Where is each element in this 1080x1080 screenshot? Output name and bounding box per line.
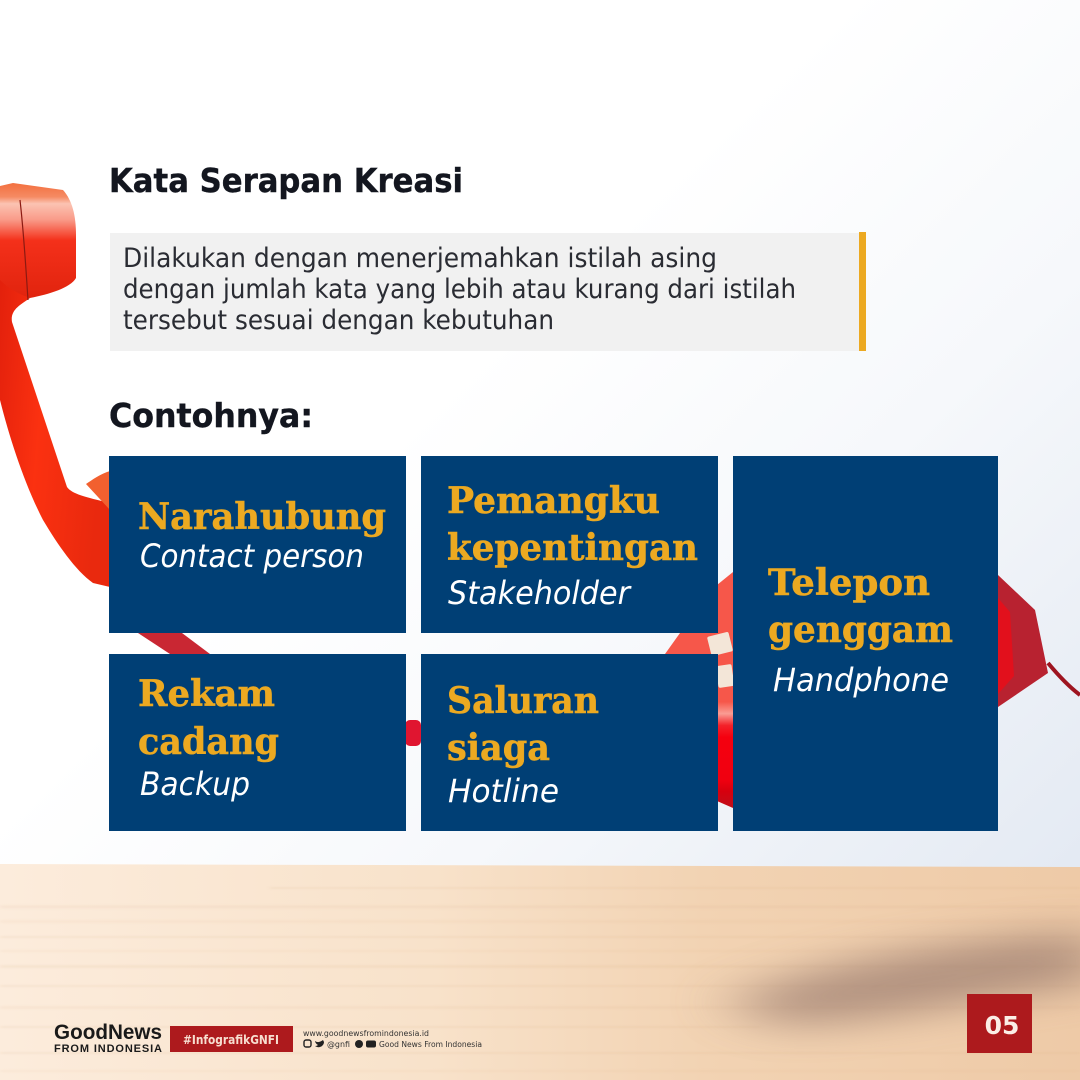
definition callout: Dilakukan dengan menerjemahkan istilah asing [123,243,717,274]
definition callout: dengan jumlah kata yang lebih atau kurang dari istilah [123,274,796,305]
card: Telepon genggam: genggam [768,609,953,651]
card: Saluran siaga: Saluran [447,680,599,722]
card: Pemangku kepentingan: Pemangku [447,480,660,522]
social media links: www.goodnewsfromindonesia.id [303,1029,429,1038]
card: Telepon genggam: Handphone [773,661,949,699]
card: Narahubung: Narahubung [138,496,386,538]
icon: twitter [315,1040,324,1047]
icon: instagram [304,1040,311,1047]
card: Pemangku kepentingan: kepentingan [447,527,698,569]
icon: facebook [355,1040,363,1048]
definition callout: tersebut sesuai dengan kebutuhan [123,305,554,336]
card: Rekam cadang [109,654,406,831]
hashtag badge: #InfografikGNFI [183,1032,279,1047]
card: Saluran siaga [421,654,718,831]
card: Telepon genggam: Telepon [768,562,930,604]
card: Rekam cadang: Backup [140,765,250,803]
card: Pemangku kepentingan [421,456,718,633]
card: Narahubung [109,456,406,633]
page number badge: 05 [985,1011,1019,1040]
wooden table [0,864,1080,1080]
card: Pemangku kepentingan: Stakeholder [448,574,632,612]
heading: examples: Contohnya: [109,396,313,435]
social media links: Good News From Indonesia [379,1040,482,1049]
footer logo: GoodNews from Indonesia [54,1021,162,1055]
footer logo: GoodNews from Indonesia: FROM INDONESIA [54,1043,162,1055]
card: Narahubung: Contact person [140,537,364,575]
card: Rekam cadang: cadang [138,721,279,763]
red telephone base [665,572,1080,808]
social media links: @gnfi [327,1040,350,1049]
icon: youtube [366,1040,376,1048]
coiled phone cord [138,633,421,746]
page number badge [967,994,1032,1053]
definition callout [110,232,866,351]
card: Saluran siaga: Hotline [448,772,559,810]
footer logo: GoodNews from Indonesia: GoodNews [54,1021,162,1044]
card: Telepon genggam [733,456,998,831]
card: Rekam cadang: Rekam [138,673,275,715]
hashtag badge [170,1026,293,1052]
social media links [303,1029,482,1049]
title: Kata Serapan Kreasi [109,161,463,200]
card: Saluran siaga: siaga [447,727,550,769]
red telephone handset [0,183,110,587]
